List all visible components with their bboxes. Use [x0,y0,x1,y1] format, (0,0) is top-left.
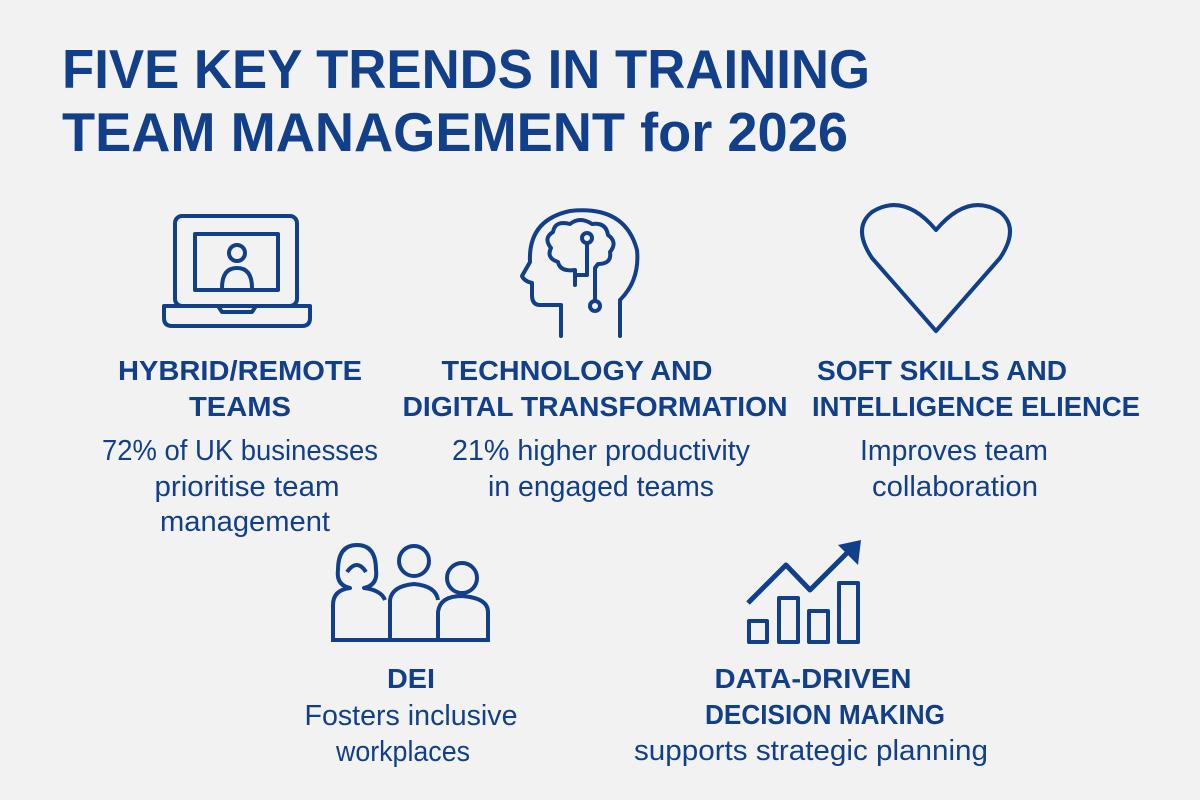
body text [860,435,1048,503]
panel: soft skills: INTELLIGENCE ELIENCE [812,391,1140,422]
heading: SOFT SKILLS AND [817,355,1067,386]
icon: laptop [164,216,310,326]
body text [452,435,750,503]
icon: head with circuit brain [522,210,637,336]
heading: DATA-DRIVEN [714,663,912,694]
body text: supports strategic planning [634,735,988,767]
body text [304,700,518,768]
body text: 72% of UK businesses [102,435,378,467]
panel: data-driven: DECISION MAKING [705,699,945,730]
panel: data-driven [634,540,988,767]
title: TEAM MANAGEMENT for 2026 [62,101,848,163]
heading: HYBRID/REMOTE [118,355,362,386]
title [62,38,870,163]
body text: Fosters inclusive [304,700,518,732]
panel: hybrid/remote teams: TEAMS [189,391,291,422]
icon: arrowhead [838,540,861,565]
icon: heart [862,205,1010,331]
body text: collaboration [872,471,1038,503]
panel: DEI [304,545,518,768]
body text: in engaged teams [488,471,714,503]
title: FIVE KEY TRENDS IN TRAINING [62,38,870,100]
icon: people [331,545,490,640]
body text: management [160,506,330,538]
icon: bar chart with arrow [748,550,858,642]
body text: prioritise team [154,471,340,503]
body text: 21% higher productivity [452,435,750,467]
body text [102,435,378,538]
panel: technology: DIGITAL TRANSFORMATION [402,391,788,422]
panel: soft skills [812,205,1140,503]
body text: Improves team [860,435,1048,467]
body text: workplaces [335,736,470,768]
panel: technology [402,210,788,503]
heading: TECHNOLOGY AND [442,355,712,386]
heading: DEI [387,663,435,694]
panel: hybrid/remote teams [102,216,378,538]
